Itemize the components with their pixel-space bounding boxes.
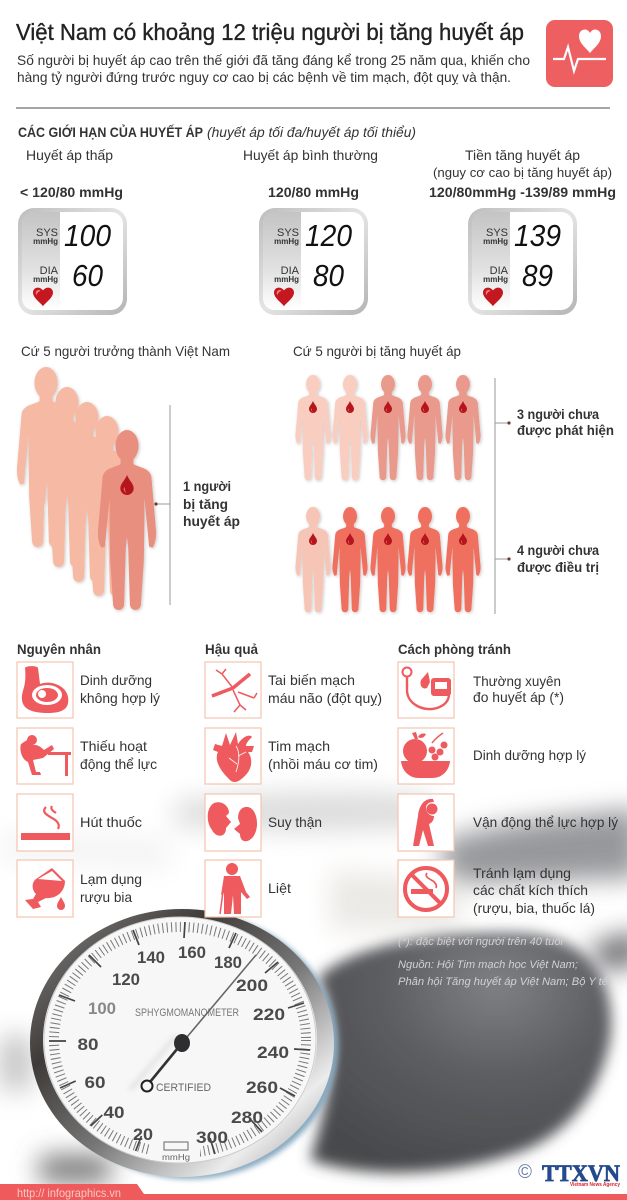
text: moderate exercise: Vận động thể lực hợp lý bbox=[473, 814, 618, 830]
callout: 4 untreated: 4 người chưa bbox=[517, 542, 599, 558]
column: prevention bbox=[398, 641, 618, 917]
gauge scale numbers: 100 bbox=[88, 999, 116, 1018]
intro text bbox=[17, 52, 530, 85]
text: alcohol abuse: rượu bia bbox=[80, 889, 132, 905]
callout: 1 person bbox=[183, 478, 240, 529]
text: lack of exercise: Thiếu hoạt bbox=[80, 738, 147, 754]
callout: 3 undetected: được phát hiện bbox=[517, 422, 614, 438]
icon: kidneys bbox=[205, 794, 261, 851]
monitor: 139/89 bbox=[468, 208, 577, 315]
callout: 4 untreated bbox=[517, 542, 599, 575]
heading: blood pressure limits: (huyết áp tối đa/huyết áp tối thiểu) bbox=[207, 125, 416, 140]
monitor: 139/89: mmHg bbox=[483, 275, 508, 284]
column: causes bbox=[17, 641, 160, 917]
TTXVN logo: Vietnam News Agency bbox=[570, 1182, 620, 1188]
callout: 3 undetected bbox=[517, 406, 614, 438]
monitor: 120/80: DIA bbox=[281, 265, 300, 277]
website url: http:// infographics.vn bbox=[17, 1186, 121, 1200]
text: heart disease: (nhồi máu cơ tim) bbox=[268, 756, 378, 772]
TTXVN logo: TTXVN bbox=[542, 1161, 620, 1186]
gauge scale numbers: 140 bbox=[137, 948, 165, 967]
icon: alcohol abuse bbox=[17, 860, 73, 917]
icon: fruit bowl bbox=[398, 728, 454, 784]
footnotes and source: Phân hội Tăng huyết áp Việt Nam; Bộ Y tế bbox=[398, 976, 609, 988]
monitor: 120/80 bbox=[259, 208, 368, 315]
text: heart disease: Tim mạch bbox=[268, 738, 330, 754]
heading: blood pressure limits: CÁC GIỚI HẠN CỦA HUYẾT ÁP bbox=[18, 125, 203, 140]
monitor: 100/60: SYS bbox=[36, 227, 58, 239]
panel: pre-hypertension bbox=[429, 147, 616, 315]
text: alcohol abuse bbox=[80, 871, 142, 905]
gauge dial labels: SPHYGMOMANOMETER bbox=[135, 1007, 239, 1019]
callout: 3 undetected: 3 người chưa bbox=[517, 406, 599, 422]
text: stroke: máu não (đột quỵ) bbox=[268, 690, 382, 706]
text: stroke bbox=[268, 672, 382, 706]
gauge scale numbers: 120 bbox=[112, 970, 140, 989]
callout: 1 person: huyết áp bbox=[183, 513, 240, 529]
icon: blood vessels, stroke bbox=[205, 662, 261, 718]
icon: heart organ bbox=[205, 728, 261, 784]
footnotes and source bbox=[398, 936, 609, 988]
panel: low blood pressure: < 120/80 mmHg bbox=[20, 185, 123, 200]
panel: normal blood pressure bbox=[243, 147, 378, 315]
gauge dial labels: mmHg bbox=[162, 1153, 190, 1162]
panel: low blood pressure: Huyết áp thấp bbox=[26, 147, 113, 163]
panel: normal blood pressure: 120/80 mmHg bbox=[268, 185, 359, 200]
text: check blood pressure: đo huyết áp (*) bbox=[473, 689, 564, 705]
footnotes and source: Nguồn: Hội Tim mạch học Việt Nam; bbox=[398, 959, 578, 971]
text: avoid stimulants bbox=[473, 865, 595, 916]
gauge scale numbers: 280 bbox=[231, 1108, 263, 1127]
text: poor diet: Dinh dưỡng bbox=[80, 672, 152, 688]
monitor: 100/60: 100 bbox=[64, 218, 111, 253]
monitor: 139/89: 139 bbox=[514, 218, 561, 253]
icon: no smoking bbox=[398, 860, 454, 917]
text: poor diet: không hợp lý bbox=[80, 690, 160, 706]
title: Việt Nam có khoảng 12 triệu người bị tăng huyết áp bbox=[16, 19, 524, 45]
photo: sphygmomanometer gauge bbox=[30, 909, 338, 1179]
monitor: 100/60: mmHg bbox=[33, 237, 58, 246]
gauge scale numbers: 40 bbox=[104, 1103, 124, 1122]
icon: lack of exercise bbox=[17, 728, 73, 784]
gauge scale numbers: 200 bbox=[236, 976, 268, 995]
text: paralysis: Liệt bbox=[268, 880, 291, 896]
monitor: 120/80: mmHg bbox=[274, 237, 299, 246]
text: avoid stimulants: (rượu, bia, thuốc lá) bbox=[473, 900, 595, 916]
column: consequences: Hậu quả bbox=[205, 641, 258, 657]
gauge scale numbers: 160 bbox=[178, 943, 206, 962]
TTXVN logo: © bbox=[518, 1162, 532, 1183]
TTXVN logo bbox=[518, 1161, 620, 1188]
callout: 1 person: bị tăng bbox=[183, 496, 228, 512]
icon: blood pressure monitor bbox=[398, 662, 454, 718]
gauge needle bbox=[130, 955, 256, 1092]
gauge scale numbers: 20 bbox=[133, 1125, 153, 1144]
monitor: 100/60: DIA bbox=[40, 265, 59, 277]
text: stroke: Tai biến mạch bbox=[268, 672, 355, 688]
monitor: 120/80: mmHg bbox=[274, 275, 299, 284]
footer bar bbox=[0, 1184, 627, 1200]
intro text: Số người bị huyết áp cao trên thế giới đã tăng đáng kể trong 25 năm qua, khiến cho bbox=[17, 52, 530, 68]
icon: paralysis, person with cane bbox=[205, 860, 261, 917]
gauge scale numbers bbox=[78, 943, 289, 1147]
text: avoid stimulants: Tránh lạm dụng bbox=[473, 865, 571, 881]
icon: smoking bbox=[17, 794, 73, 851]
gauge scale numbers: 220 bbox=[253, 1005, 285, 1024]
callout: 4 untreated: được điều trị bbox=[517, 559, 599, 575]
monitor: 139/89: DIA bbox=[490, 265, 509, 277]
text: heart disease bbox=[268, 738, 378, 772]
column: causes: Nguyên nhân bbox=[17, 641, 101, 657]
panel: among 5 with hypertension: Cứ 5 người bị tăng huyết áp bbox=[293, 343, 461, 359]
monitor: 100/60 bbox=[18, 208, 127, 315]
monitor: 100/60: mmHg bbox=[33, 275, 58, 284]
gauge scale numbers: 300 bbox=[196, 1128, 228, 1147]
icon: exercise bbox=[398, 794, 454, 851]
figures: five adults bbox=[17, 367, 156, 610]
text: healthy diet: Dinh dưỡng hợp lý bbox=[473, 747, 586, 763]
column: prevention: Cách phòng tránh bbox=[398, 641, 511, 657]
monitor: 139/89: SYS bbox=[486, 227, 508, 239]
panel: 1 in 5 adults: Cứ 5 người trưởng thành Việt Nam bbox=[21, 343, 230, 359]
text: smoking: Hút thuốc bbox=[80, 814, 142, 830]
column: consequences bbox=[205, 641, 382, 917]
monitor: 120/80: SYS bbox=[277, 227, 299, 239]
gauge scale numbers: 180 bbox=[214, 953, 242, 972]
text: avoid stimulants: các chất kích thích bbox=[473, 882, 588, 898]
gauge scale numbers: 260 bbox=[246, 1078, 278, 1097]
monitor: 120/80: 120 bbox=[305, 218, 352, 253]
panel: normal blood pressure: Huyết áp bình thường bbox=[243, 147, 378, 163]
panel: low blood pressure bbox=[18, 147, 127, 315]
photo: rubber inflation bulb bbox=[310, 933, 611, 1173]
text: alcohol abuse: Lạm dụng bbox=[80, 871, 142, 887]
panel: pre-hypertension: Tiền tăng huyết áp bbox=[465, 147, 580, 163]
monitor: 120/80: 80 bbox=[313, 258, 344, 293]
callout: 1 person: 1 người bbox=[183, 478, 231, 494]
gauge scale numbers: 80 bbox=[78, 1035, 98, 1054]
text: check blood pressure bbox=[473, 673, 564, 705]
text: lack of exercise bbox=[80, 738, 157, 772]
panel: 1 in 5 adults bbox=[17, 343, 240, 610]
gauge major tick marks bbox=[49, 922, 310, 1154]
gauge scale numbers: 60 bbox=[84, 1073, 106, 1092]
heading: blood pressure limits bbox=[18, 125, 416, 140]
gauge minor tick marks bbox=[54, 927, 306, 1153]
panel: pre-hypertension: 120/80mmHg -139/89 mmHg bbox=[429, 185, 616, 200]
panel: pre-hypertension: (nguy cơ cao bị tăng huyết áp) bbox=[433, 165, 612, 180]
icon: poor diet, scale and meat bbox=[17, 662, 73, 718]
icon: heart with pulse bbox=[546, 20, 613, 87]
intro text: hàng tỷ người đứng trước nguy cơ cao bị các bệnh về tim mạch, đột quỵ và thận. bbox=[17, 69, 511, 85]
figures: 3 undetected bbox=[295, 375, 481, 480]
monitor: 100/60: 60 bbox=[72, 258, 103, 293]
gauge dial labels bbox=[135, 1007, 239, 1162]
text: check blood pressure: Thường xuyên bbox=[473, 673, 561, 689]
footnotes and source: (*): đặc biệt với người trên 40 tuổi bbox=[398, 936, 564, 948]
text: lack of exercise: động thể lực bbox=[80, 756, 157, 772]
text: poor diet bbox=[80, 672, 160, 706]
text: kidney failure: Suy thận bbox=[268, 814, 322, 830]
monitor: 139/89: 89 bbox=[522, 258, 553, 293]
gauge scale numbers: 240 bbox=[257, 1043, 289, 1062]
monitor: 139/89: mmHg bbox=[483, 237, 508, 246]
panel: among 5 with hypertension bbox=[293, 343, 614, 614]
gauge dial labels: CERTIFIED bbox=[156, 1082, 211, 1094]
figures: 4 untreated bbox=[295, 507, 481, 612]
